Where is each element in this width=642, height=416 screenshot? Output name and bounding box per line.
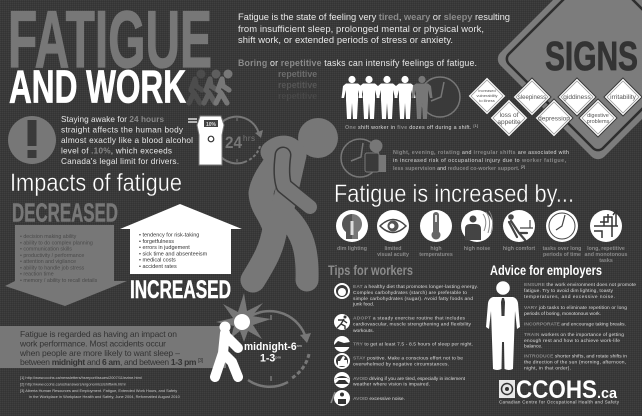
text: staying awake for 24 hours: Staying awake for 24 hours: [61, 115, 164, 124]
list: increased items: • forgetfulness: [139, 239, 174, 245]
text: employer advice: temperatures, and excessive noise.: [524, 294, 615, 300]
sign: depression: depression: [538, 116, 570, 122]
text: avoid driving tip: [353, 376, 466, 388]
sign: large diamond: [494, 0, 642, 163]
text: employer advice: INCORPORATE and encourage taking breaks.: [524, 322, 626, 328]
icon: high temperatures: [420, 210, 452, 242]
text: avoid noise tip: AVOID excessive noise.: [353, 396, 405, 402]
sign: irritability: [604, 78, 642, 116]
sign: digestive problems: digestive: [587, 113, 609, 119]
text: eat tip: EAT a healthy diet that promotes longer-lasting energy.: [353, 284, 478, 290]
text: fatigue definition: [238, 11, 510, 45]
arrow: down: [5, 225, 127, 306]
title: Fatigue and Work: AND WORK: [9, 60, 186, 112]
icon: long repetitive and monotonous tasks: [590, 210, 622, 242]
icon: runner: [334, 314, 350, 330]
icon: clock with burst and stumbling person: midnight-6: [244, 341, 300, 353]
panel: accident times banner: [3]: [198, 358, 204, 364]
text: irregular shifts risk: Night, evening, rotating and irregular shifts are associated with: [393, 150, 569, 156]
text: employer advice: enough rest and how to achieve work-life: [524, 338, 620, 344]
sign: digestive problems: [579, 99, 617, 137]
icon: clock and two co-workers: [341, 139, 386, 177]
text: one shift worker in five: One shift worker in five dozes off during a shift.: [345, 125, 471, 131]
label: limited visual acuity: limited: [384, 246, 402, 252]
icon: dim lighting: [336, 210, 368, 242]
text: adopt tip: cardiovascular, muscle strengthening and flexibility: [353, 322, 472, 328]
icon: breathalyzer reading 10%: 10%: [206, 122, 217, 128]
icon: car in weather: [334, 372, 350, 388]
list: increased items: • tendency for risk-taking: [139, 232, 199, 238]
text: boring or repetitive tasks: repetitive: [278, 69, 317, 79]
text: references: [2] http://www.ccohs.ca/oshanswers/ergonomics/shiftwrk.html: [20, 382, 126, 386]
arrow: up: [120, 204, 242, 274]
text: adopt tip: ADOPT a steady exercise routine that includes: [353, 316, 466, 322]
label: tasks over long periods of time: periods of time: [543, 252, 581, 258]
label: limited visual acuity: visual acuity: [377, 252, 409, 258]
icon: 24 hours clock: [221, 117, 263, 163]
text: fatigue definition: shift work, or extended periods of stress or anxiety.: [238, 34, 453, 45]
list: decreased items: • ability to handle job stress: [20, 265, 85, 271]
list: increased items: • errors in judgement: [139, 245, 190, 251]
logo: CCOHS: CCOHS: [516, 376, 597, 404]
icon: 24 hours clock: hrs: [243, 134, 255, 143]
icon: three tired walking figures: [189, 70, 232, 103]
icon: high comfort: [503, 210, 535, 242]
text: stay tip: [353, 356, 463, 368]
text: employer advice: night, in that order).: [524, 366, 571, 372]
text: employer advice: ENSURE the work environment does not promote: [524, 282, 636, 288]
label: long repetitive and monotonous tasks: long, repetitive: [587, 246, 625, 252]
text: staying awake for 24 hours: straight affects the human body: [61, 126, 184, 134]
text: references: [1] http://www.ccohs.ca/newsletters/hsreport/issues/2007/11/ezine.html: [20, 375, 142, 380]
sign: giddiness: giddiness: [563, 94, 591, 101]
sign: increased vulnerability to illness: [468, 77, 506, 115]
sign: loss of appetite: [490, 99, 528, 137]
text: stay tip: overwhelmed by negative circumstances.: [353, 362, 449, 368]
text: avoid driving tip: weather where vision is impaired.: [353, 382, 430, 388]
icon: thumbs up: [335, 354, 349, 368]
list: decreased items: • reaction time: [20, 272, 54, 278]
text: try tip: TRY to get at least 7.5 - 8.5 hours of sleep per night.: [353, 342, 473, 348]
sign: digestive problems: problems: [587, 119, 610, 125]
text: staying awake for 24 hours: almost exactly like a blood alcohol: [61, 136, 193, 145]
heading: impacts of fatigue: Impacts of fatigue: [10, 169, 182, 197]
text: employer advice: INTRODUCE shorter shifts, and rotate shifts in: [524, 354, 627, 360]
heading: tips for workers: Tips for workers: [328, 262, 413, 278]
list: decreased items: • ability to do complex planning: [20, 240, 93, 246]
icon: 24 hours clock: 24: [225, 133, 242, 152]
sign: increased vulnerability to illness: to illness: [479, 98, 495, 103]
list: decreased items: [20, 234, 98, 284]
label: long repetitive and monotonous tasks: tasks: [599, 258, 613, 264]
label: tasks over long periods of time: tasks over long: [543, 246, 581, 252]
sign: sleepiness: sleepiness: [518, 95, 546, 101]
list: increased items: [139, 232, 208, 270]
text: eat tip: Complex carbohydrates (starch) are preferable to: [353, 290, 467, 296]
icon: clock with burst and stumbling person: am: [297, 343, 302, 348]
text: eat tip: [352, 284, 478, 308]
text: references: in the Workplace in Workplace Health and Safety, June 2004, Reformatted August 2010: [29, 394, 181, 399]
list: increased items: • medical costs: [139, 258, 176, 264]
text: adopt tip: workouts.: [353, 328, 374, 334]
label: limited visual acuity: [377, 246, 409, 258]
text: boring or repetitive tasks: repetitive: [278, 80, 317, 90]
text: employer advice: balance.: [524, 344, 542, 350]
label: long repetitive and monotonous tasks: and monotonous: [585, 252, 628, 258]
list: decreased items: • decision making ability: [20, 234, 77, 240]
list: decreased items: • attention and vigilance: [20, 259, 76, 265]
panel: decreased: [5, 198, 127, 306]
sign: increased vulnerability to illness: increased: [478, 88, 496, 93]
sign: irritability: irritability: [610, 94, 637, 101]
label: high comfort: high comfort: [503, 246, 535, 252]
icon: noise: [331, 390, 350, 406]
label: high temperatures: high: [430, 246, 442, 252]
text: boring or repetitive tasks: repetitive: [278, 91, 317, 101]
label: high noise: high noise: [464, 246, 490, 252]
icon: clock with burst and stumbling person: 1-3: [260, 352, 276, 364]
panel: accident times banner: work performance. Most accidents occur: [19, 338, 166, 348]
logo: CCOHS: Canadian Centre for Occupational Health and Safety: [499, 400, 620, 404]
text: employer advice: fatigue. Try to avoid dim lighting, toasty: [524, 288, 614, 294]
text: irregular shifts risk: less supervision and reduced co-worker support.: [393, 166, 519, 172]
text: employer advice: [524, 282, 636, 372]
icon: man in suit with tie: [486, 281, 520, 370]
text: employer advice: the direction of the sun (morning, afternoon,: [524, 360, 626, 366]
sign: giddiness: [558, 78, 596, 116]
text: employer advice: TRAIN workers on the importance of getting: [524, 332, 624, 338]
text: boring or repetitive tasks: Boring or repetitive tasks can intensify feelings of fatigue.: [238, 58, 477, 68]
icon: five shift workers and clock: [342, 76, 460, 119]
text: irregular shifts risk: in increased risk of occupational injury due to worker fatigue,: [393, 158, 566, 164]
icon: large tired person: [253, 118, 338, 280]
label: tasks over long periods of time: [543, 246, 581, 258]
label: long repetitive and monotonous tasks: [585, 246, 628, 264]
list: decreased items: • productivity / performance: [20, 253, 84, 259]
title: Fatigue and Work: [8, 0, 212, 112]
sign: depression: [535, 99, 573, 137]
label: high temperatures: temperatures: [419, 252, 453, 258]
text: eat tip: junk food.: [352, 302, 374, 308]
sign: increased vulnerability to illness: vulnerability: [476, 93, 498, 98]
icon: exclamation mark in circle: [8, 116, 56, 164]
icon: bed: [334, 336, 350, 352]
text: fatigue definition: Fatigue is the state of feeling very tired, weary or sleepy resulting: [238, 11, 510, 22]
text: irregular shifts risk: [2]: [521, 165, 525, 169]
text: boring or repetitive tasks: [238, 58, 477, 101]
text: fatigue definition: from insufficient sleep, prolonged mental or physical work,: [238, 23, 484, 34]
heading: advice for employers: Advice for employers: [490, 262, 602, 278]
list: decreased items: • memory / ability to recall details: [20, 278, 98, 284]
label: high temperatures: [419, 246, 453, 258]
icon: clock with burst and stumbling person: [215, 293, 311, 387]
icon: apple: [335, 284, 349, 298]
text: references: [3] Alberta Human Resources and Employment. Fatigue, Extended Work Hours, and Safety: [20, 388, 177, 393]
icon: limited visual acuity: [377, 210, 409, 242]
text: staying awake for 24 hours: Canada's legal limit for drivers.: [61, 157, 179, 166]
text: irregular shifts risk: [393, 150, 569, 172]
text: stay tip: STAY positive. Make a conscious effort not to be: [353, 356, 463, 362]
sign: loss of appetite: loss of: [500, 112, 519, 119]
list: decreased items: • communication skills: [20, 246, 72, 252]
panel: advice for employers: [486, 262, 636, 372]
text: adopt tip: [353, 316, 472, 334]
heading: decreased: DECREASED: [12, 198, 118, 228]
text: avoid driving tip: AVOID driving if you are tired, especially in inclement: [353, 376, 466, 382]
list: increased items: • sick time and absenteeism: [139, 251, 208, 257]
sign: sleepiness: [513, 78, 551, 116]
panel: fatigue factors: [336, 210, 628, 264]
panel: accident times banner: when people are more likely to want sleep –: [19, 348, 180, 358]
label: dim lighting: dim lighting: [337, 246, 367, 252]
text: eat tip: simple carbohydrates (sugar). Avoid fatty foods and: [353, 296, 473, 302]
panel: accident times banner: Fatigue is regarded as having an impact on: [20, 329, 177, 339]
text: staying awake for 24 hours: [61, 115, 193, 166]
icon: high noise: [461, 210, 493, 242]
list: increased items: • accident rates: [139, 264, 177, 270]
heading: increased: INCREASED: [130, 276, 231, 304]
text: employer advice: periods of boring, monotonous work.: [524, 311, 601, 317]
text: references: [20, 375, 181, 399]
icon: clock with burst and stumbling person: pm: [275, 354, 281, 360]
sign: loss of appetite: appetite: [497, 119, 521, 126]
panel: increased: [120, 204, 242, 304]
text: staying awake for 24 hours: level of .10%, which exceeds: [61, 146, 172, 156]
icon: breathalyzer reading 10%: [188, 116, 224, 165]
icon: tasks over long periods of time: [546, 210, 578, 242]
logo: CCOHS: .ca: [597, 385, 618, 402]
panel: signs: [468, 0, 642, 163]
panel: accident times banner: between midnight and 6 am, and between 1-3 pm: [20, 357, 196, 367]
text: employer advice: VARY job tasks to eliminate repetition or long: [524, 305, 627, 311]
panel: accident times banner: [0, 326, 226, 368]
text: one shift worker in five: [1]: [473, 124, 478, 128]
panel: tips for workers: [328, 262, 478, 406]
heading: fatigue is increased by: Fatigue is increased by...: [334, 180, 574, 208]
